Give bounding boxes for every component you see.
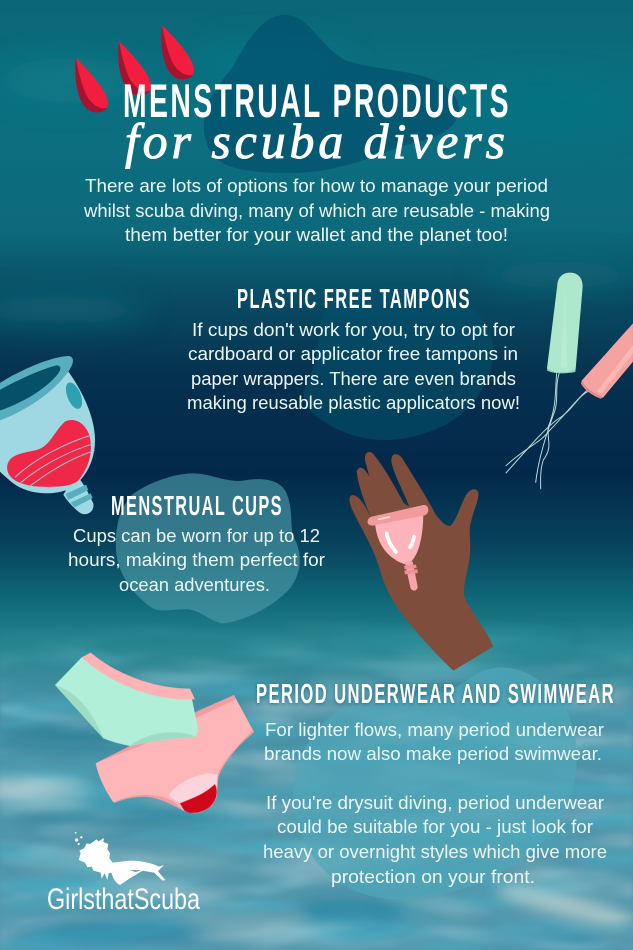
cup window [63, 380, 85, 411]
icon: tampons [506, 273, 633, 489]
hand [349, 452, 493, 671]
icon: drop 1 [75, 58, 108, 112]
green underwear [55, 653, 198, 746]
intro text: There are lots of options for how to manage your period [85, 176, 548, 196]
intro text: them better for your wallet and the planet too! [125, 225, 508, 245]
hand cup body [375, 513, 423, 564]
text: plastic free tampons [187, 320, 520, 413]
text: period underwear: could be suitable for you - just look for [277, 817, 593, 837]
blob: behind plastic free tampons [304, 283, 493, 440]
icon: tampon strings [506, 373, 589, 489]
hand cup stem [404, 562, 418, 591]
icon: drop 3 [161, 25, 194, 79]
text: period underwear: For lighter flows, many period underwear [265, 720, 604, 740]
icon: menstrual cup [0, 356, 95, 514]
text: period underwear: heavy or overnight styles which give more [263, 842, 607, 862]
icon: green tampon [547, 273, 583, 373]
text: period underwear: If you're drysuit diving, period underwear [266, 793, 604, 813]
text: plastic free tampons: cardboard or applicator free tampons in [188, 344, 518, 364]
logo text: GirlsthatScuba [47, 883, 200, 916]
heading: plastic free tampons: PLASTIC FREE TAMPONS [237, 283, 471, 314]
text: plastic free tampons: If cups don't work for you, try to opt for [192, 320, 515, 340]
icon: pink tampon [581, 323, 633, 399]
text: menstrual cups: Cups can be worn for up to 12 [73, 526, 320, 546]
icon: drop 2 [118, 41, 151, 95]
text: plastic free tampons: making reusable plastic applicators now! [187, 393, 520, 413]
text: menstrual cups: ocean adventures. [119, 575, 270, 595]
heading: menstrual cups: MENSTRUAL CUPS [111, 490, 283, 521]
text: plastic free tampons: paper wrappers. There are even brands [191, 369, 516, 389]
cup rim [0, 356, 73, 422]
logo: girls that scuba [47, 832, 200, 916]
cup opening [0, 365, 60, 412]
hand cup rim [368, 505, 428, 526]
cup body [0, 372, 95, 493]
blob: behind menstrual cups [116, 473, 300, 623]
cup blood [7, 420, 91, 487]
icon: diver silhouette [75, 832, 165, 885]
intro text [83, 176, 550, 245]
intro text: whilst scuba diving, many of which are reusable - making [83, 201, 550, 221]
icon: hand holding cup [349, 452, 493, 671]
blob: behind period underwear [293, 667, 577, 899]
hand cup highlights [379, 517, 414, 552]
icon: blood drops [75, 25, 194, 112]
cup measurement lines [15, 434, 95, 487]
text: menstrual cups: hours, making them perfect for [68, 550, 325, 570]
title line 2: for scuba divers [125, 113, 509, 169]
text: period underwear: brands now also make period swimwear. [264, 744, 602, 764]
pink underwear [96, 695, 254, 813]
icon: period underwear [55, 653, 254, 813]
cup stem [63, 479, 93, 514]
text: period underwear [263, 720, 607, 887]
title [123, 74, 511, 169]
text: menstrual cups [68, 526, 325, 595]
text: period underwear: protection on your front. [331, 867, 535, 887]
blob: behind title [204, 15, 459, 173]
